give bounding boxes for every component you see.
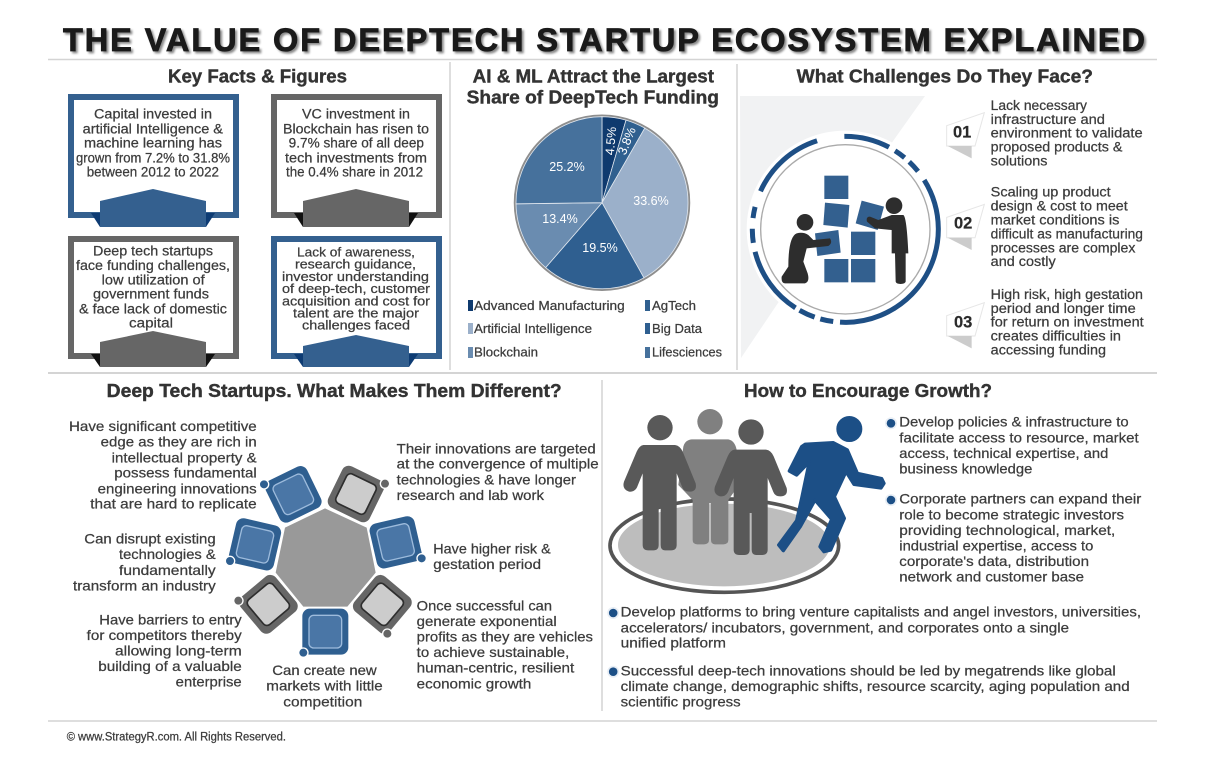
text: new markets: Can create new bbox=[272, 662, 378, 678]
legend: AgTech bbox=[652, 298, 696, 313]
bullet: corporate partners: industrial expertise, access to bbox=[899, 537, 1094, 553]
challenge 02: difficult as manufacturing bbox=[991, 226, 1143, 241]
pie chart: 19.5% bbox=[582, 241, 618, 255]
card: major challenges: Lack of awareness, bbox=[297, 245, 415, 260]
bullet: corporate partners: role to become strategic investors bbox=[899, 506, 1124, 522]
pie chart: 25.2% bbox=[549, 160, 585, 174]
text: barriers: allowing long-term bbox=[115, 643, 242, 659]
bullet: corporate partners bbox=[885, 491, 1142, 585]
panel: encourage growth bbox=[607, 381, 1142, 710]
challenge 01: environment to validate bbox=[991, 126, 1143, 141]
card: major challenges: acquisition and cost for bbox=[282, 293, 431, 308]
bullet: policies: access, technical expertise, and bbox=[899, 445, 1108, 461]
text: convergence: at the convergence of multiple bbox=[397, 456, 599, 472]
legend: Artificial Intelligence bbox=[474, 321, 592, 336]
pie chart: 4.5% bbox=[603, 126, 619, 156]
bullet: megatrends: Successful deep-tech innovations should be led by megatrends like global bbox=[621, 663, 1116, 679]
challenge 03: 03 bbox=[954, 314, 972, 332]
text: competitive edge: intellectual property & bbox=[112, 449, 257, 465]
panel: challenges bbox=[740, 67, 1144, 358]
text: convergence: research and lab work bbox=[397, 487, 545, 503]
card: AI capital: between 2012 to 2022 bbox=[87, 165, 219, 180]
text: new markets bbox=[266, 662, 383, 709]
panel: what makes them different bbox=[69, 381, 599, 709]
text: barriers: for competitors thereby bbox=[87, 627, 242, 643]
bullet: corporate partners: corporate's data, distribution bbox=[899, 553, 1089, 569]
bullet: platforms: unified platform bbox=[621, 635, 726, 651]
card: funding challenges: government funds bbox=[93, 287, 209, 302]
text: competitive edge: Have significant competitive bbox=[69, 418, 257, 434]
card: AI capital: grown from 7.2% to 31.8% bbox=[76, 150, 230, 165]
challenge 02: market conditions is bbox=[991, 212, 1120, 227]
card: blockchain VC: Blockchain has risen to bbox=[283, 121, 429, 136]
challenge 01: proposed products & bbox=[991, 140, 1122, 155]
card: blockchain VC bbox=[274, 97, 439, 227]
legend: Big Data bbox=[652, 321, 703, 336]
challenge 01: solutions bbox=[991, 153, 1048, 168]
challenge 03: for return on investment bbox=[991, 315, 1144, 330]
text: competitive edge: that are hard to replicate bbox=[90, 496, 257, 512]
bullet: policies: business knowledge bbox=[899, 461, 1033, 477]
pie chart: 3.8% bbox=[615, 125, 639, 157]
card: major challenges: talent are the major bbox=[293, 305, 420, 320]
text: exponential profits: economic growth bbox=[417, 675, 531, 691]
card: funding challenges: & face lack of domestic bbox=[79, 301, 227, 316]
text: exponential profits: to achieve sustainable, bbox=[417, 644, 569, 660]
pie chart bbox=[515, 116, 689, 290]
heading: challenges: What Challenges Do They Face? bbox=[797, 67, 1093, 87]
icon: people stacking blocks in a ring bbox=[747, 131, 944, 328]
card: funding challenges: capital bbox=[129, 316, 173, 331]
card: funding challenges: low utilization of bbox=[102, 272, 205, 287]
heading: different: Deep Tech Startups. What Makes Them Different? bbox=[107, 381, 562, 401]
bullet: policies: facilitate access to resource, market bbox=[899, 429, 1139, 445]
text: disrupt: fundamentally bbox=[119, 562, 216, 578]
challenge 03: period and longer time bbox=[991, 301, 1136, 316]
bullet: megatrends bbox=[607, 663, 1130, 710]
challenge 01: 01 bbox=[953, 124, 971, 142]
heading: growth: How to Encourage Growth? bbox=[744, 381, 992, 401]
text: exponential profits: generate exponential bbox=[417, 613, 557, 629]
text: disrupt: technologies & bbox=[119, 546, 216, 562]
pie chart: 33.6% bbox=[633, 194, 669, 208]
challenge 01: infrastructure and bbox=[991, 112, 1105, 127]
text: exponential profits: human-centric, resilient bbox=[417, 660, 574, 676]
challenge 01: Lack necessary bbox=[991, 98, 1087, 113]
challenge 02: processes are complex bbox=[991, 240, 1136, 255]
pie chart: 13.4% bbox=[542, 212, 578, 226]
text: disrupt: Can disrupt existing bbox=[84, 531, 216, 547]
legend bbox=[468, 298, 722, 360]
challenge 02: 02 bbox=[954, 214, 972, 232]
card: funding challenges: Deep tech startups bbox=[93, 243, 213, 258]
text: competitive edge: possess fundamental bbox=[114, 465, 257, 481]
card: funding challenges: face funding challenges, bbox=[76, 258, 230, 273]
text: convergence bbox=[397, 440, 599, 503]
text: exponential profits: profits as they are vehicles bbox=[417, 629, 593, 645]
challenge 03 bbox=[947, 287, 1144, 357]
legend: Lifesciences bbox=[652, 345, 722, 360]
bullet: megatrends: scientific progress bbox=[621, 694, 741, 710]
card: AI capital: Capital invested in bbox=[94, 107, 212, 122]
bullet: platforms: accelerators/ incubators, government, and corporates onto a single bbox=[621, 619, 1069, 635]
footer copyright: © www.StrategyR.com. All Rights Reserved. bbox=[67, 732, 286, 744]
bullet: corporate partners: providing technological, market, bbox=[899, 522, 1115, 538]
challenge 03: accessing funding bbox=[991, 342, 1106, 357]
challenge 03: creates difficulties in bbox=[991, 328, 1121, 343]
bullet: corporate partners: network and customer base bbox=[899, 569, 1084, 585]
card: funding challenges bbox=[71, 239, 236, 367]
bullet: platforms: Develop platforms to bring venture capitalists and angel investors, universities, bbox=[621, 604, 1141, 620]
card: major challenges: research guidance, bbox=[295, 257, 416, 272]
panel: funding share pie bbox=[467, 67, 722, 360]
bullet: policies: Develop policies & infrastructure to bbox=[899, 414, 1129, 430]
text: barriers: enterprise bbox=[176, 674, 242, 690]
card: major challenges bbox=[274, 239, 439, 367]
panel: key facts and figures bbox=[71, 67, 439, 367]
text: new markets: competition bbox=[283, 693, 362, 709]
card: blockchain VC: 9.7% share of all deep bbox=[289, 136, 424, 151]
text: disrupt: transform an industry bbox=[73, 577, 216, 593]
text: higher risk: gestation period bbox=[433, 556, 541, 572]
text: higher risk bbox=[433, 540, 551, 572]
text: competitive edge: edge as they are rich in bbox=[101, 434, 257, 450]
text: competitive edge: engineering innovations bbox=[98, 480, 257, 496]
text: exponential profits: Once successful can bbox=[417, 598, 552, 614]
legend: Advanced Manufacturing bbox=[474, 298, 625, 313]
text: convergence: Their innovations are targeted bbox=[397, 440, 596, 456]
card: AI capital: artificial Intelligence & bbox=[83, 121, 223, 136]
text: higher risk: Have higher risk & bbox=[433, 540, 551, 556]
bullet: megatrends: climate change, demographic shifts, resource scarcity, aging population and bbox=[621, 678, 1130, 694]
text: convergence: technologies & have longer bbox=[397, 471, 576, 487]
text: barriers: Have barriers to entry bbox=[99, 611, 242, 627]
card: major challenges: investor understanding bbox=[282, 269, 429, 284]
text: new markets: markets with little bbox=[266, 678, 383, 694]
challenge 03: High risk, high gestation bbox=[991, 287, 1143, 302]
challenge 02 bbox=[947, 185, 1143, 269]
card: blockchain VC: the 0.4% share in 2012 bbox=[286, 165, 423, 180]
diagram: heptagon with seven tiles bbox=[225, 463, 426, 657]
text: barriers bbox=[87, 611, 242, 690]
heading: key facts: Key Facts & Figures bbox=[168, 67, 347, 87]
text: competitive edge bbox=[69, 418, 257, 512]
background wedge bbox=[740, 96, 925, 358]
heading: AI and ML funding: Share of DeepTech Funding bbox=[467, 88, 719, 108]
bullet: platforms bbox=[607, 604, 1141, 651]
text: exponential profits bbox=[417, 598, 593, 691]
legend: Blockchain bbox=[474, 345, 538, 360]
heading: AI and ML funding: AI & ML Attract the Largest bbox=[473, 67, 714, 87]
bullet: policies bbox=[885, 414, 1139, 477]
heading: AI and ML funding bbox=[467, 67, 719, 108]
card: blockchain VC: tech investments from bbox=[285, 150, 427, 165]
challenge 02: design & cost to meet bbox=[991, 199, 1128, 214]
text: barriers: building of a valuable bbox=[98, 658, 242, 674]
card: AI capital bbox=[71, 97, 236, 227]
challenge 02: and costly bbox=[991, 254, 1056, 269]
bullet: corporate partners: Corporate partners can expand their bbox=[899, 491, 1142, 507]
challenge 02: Scaling up product bbox=[991, 185, 1111, 200]
icon: group with runner on platform bbox=[610, 409, 884, 592]
card: major challenges: of deep-tech, customer bbox=[282, 281, 431, 296]
card: major challenges: challenges faced bbox=[302, 318, 410, 333]
card: AI capital: machine learning has bbox=[84, 136, 222, 151]
title: THE VALUE OF DEEPTECH STARTUP ECOSYSTEM EXPLAINED bbox=[63, 22, 1145, 58]
text: disrupt bbox=[73, 531, 216, 593]
card: blockchain VC: VC investment in bbox=[302, 107, 410, 122]
challenge 01 bbox=[947, 98, 1143, 168]
